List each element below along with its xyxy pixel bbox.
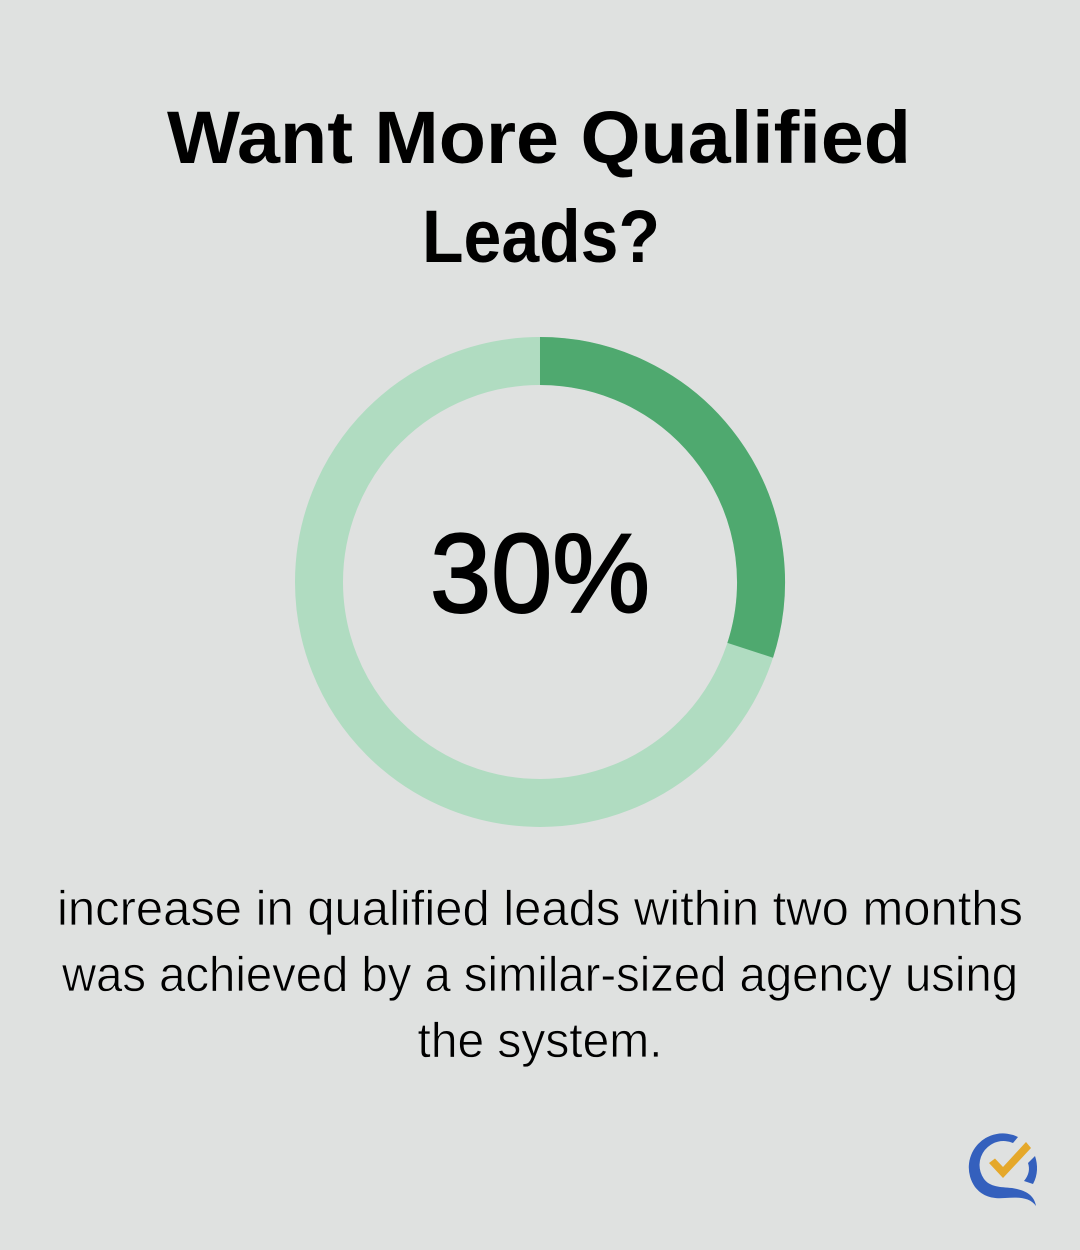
title: Want More Qualified [167, 96, 911, 179]
description text: increase in qualified leads within two months [57, 882, 1023, 936]
description text: was achieved by a similar-sized agency using [61, 948, 1018, 1002]
big number: 30% [430, 511, 650, 636]
description text [57, 882, 1023, 1068]
title: Leads? [422, 195, 660, 278]
description text: the system. [418, 1014, 662, 1068]
title [167, 96, 911, 278]
donut chart: 30% [319, 361, 761, 803]
logo icon: chat bubble with check mark [969, 1133, 1037, 1206]
